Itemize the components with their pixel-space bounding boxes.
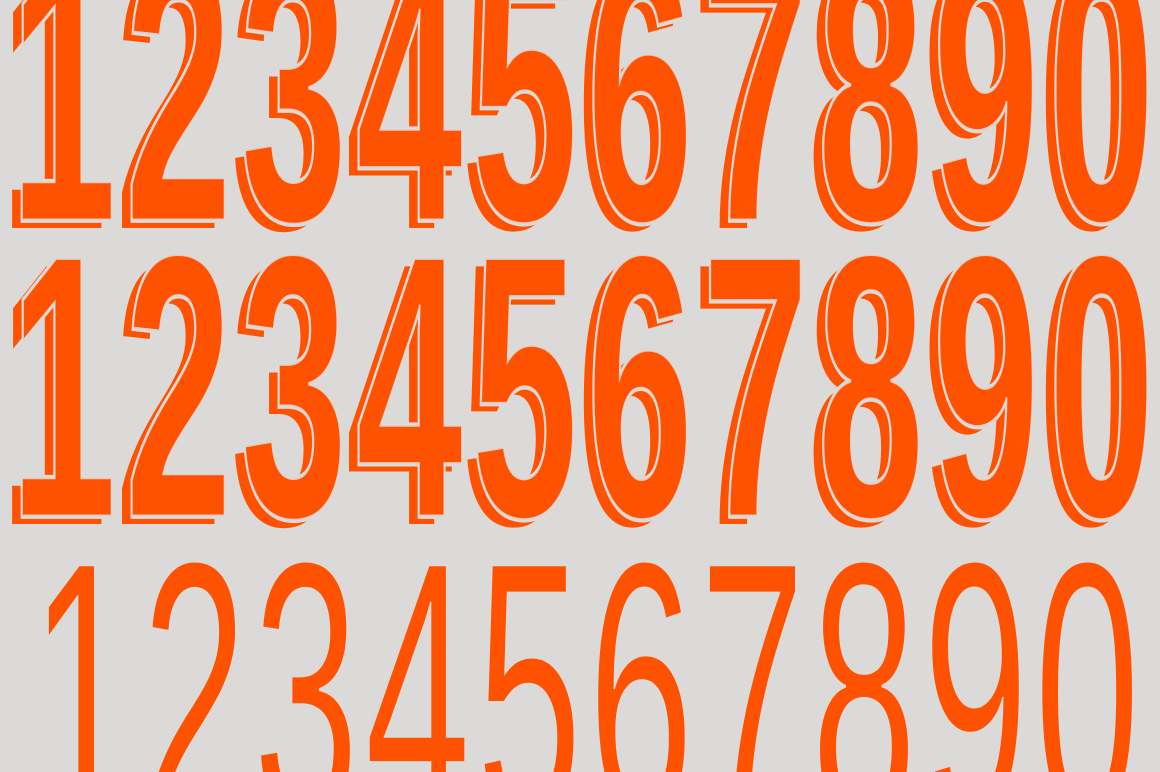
row 2: bold shadowed digits: 1234567890: [10, 179, 1155, 597]
row 2: bold shadowed digits: 1234567890: [10, 179, 1155, 597]
row 2: bold shadowed digits: 1234567890: [10, 179, 1155, 597]
row 2: bold shadowed digits: 1234567890: [0, 187, 1145, 605]
